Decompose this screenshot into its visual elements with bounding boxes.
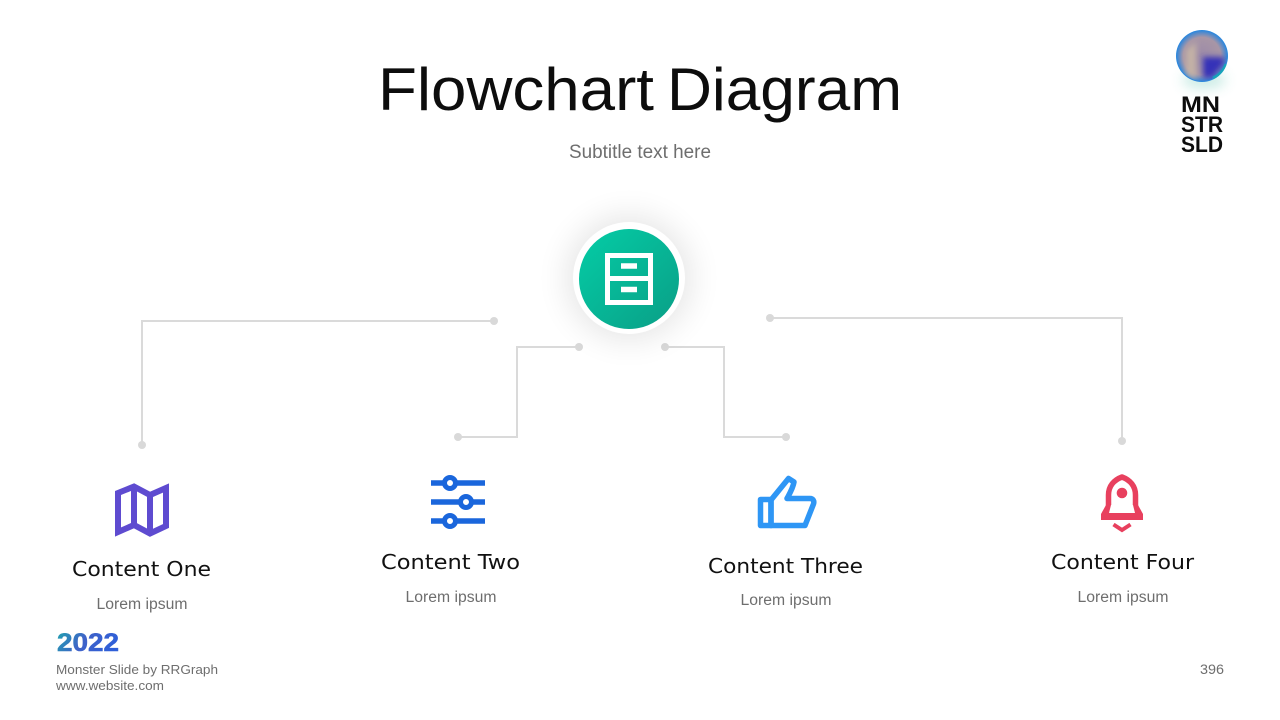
connector: center to Content Four (766, 314, 1126, 445)
icon: filing cabinet (607, 256, 651, 302)
description: Lorem ipsum (406, 589, 496, 606)
description: Lorem ipsum (96, 596, 188, 613)
logo (1176, 30, 1228, 157)
page number: 396 (1200, 661, 1224, 677)
label: Content One (72, 557, 211, 581)
logo: SLD (1181, 132, 1223, 157)
description: Lorem ipsum (1078, 589, 1168, 606)
description: Lorem ipsum (740, 592, 832, 609)
subtitle: Subtitle text here (569, 142, 711, 163)
label: Content Four (1051, 550, 1195, 574)
footer credit: www.website.com (55, 678, 164, 693)
connector: center to Content Two (454, 343, 583, 441)
item: Content Two (381, 478, 520, 606)
central node (567, 216, 691, 340)
item: Content Three (708, 478, 863, 609)
icon: thumbs up (760, 478, 814, 526)
label: Content Two (381, 550, 520, 574)
footer year: 2022 (57, 629, 119, 657)
item: Content Four (1051, 477, 1195, 606)
title: Flowchart (378, 56, 654, 123)
item: Content One (72, 486, 211, 613)
logo: STR (1181, 112, 1223, 137)
connector: center to Content Three (661, 343, 790, 441)
connector: center to Content One (138, 317, 498, 449)
footer credit (55, 662, 218, 693)
icon: bell (1101, 477, 1143, 530)
logo: MN (1181, 92, 1220, 117)
icon: map (118, 486, 166, 534)
icon: sliders (431, 478, 485, 526)
title: Diagram (667, 56, 902, 123)
footer credit: Monster Slide by RRGraph (56, 662, 218, 677)
label: Content Three (708, 554, 863, 578)
